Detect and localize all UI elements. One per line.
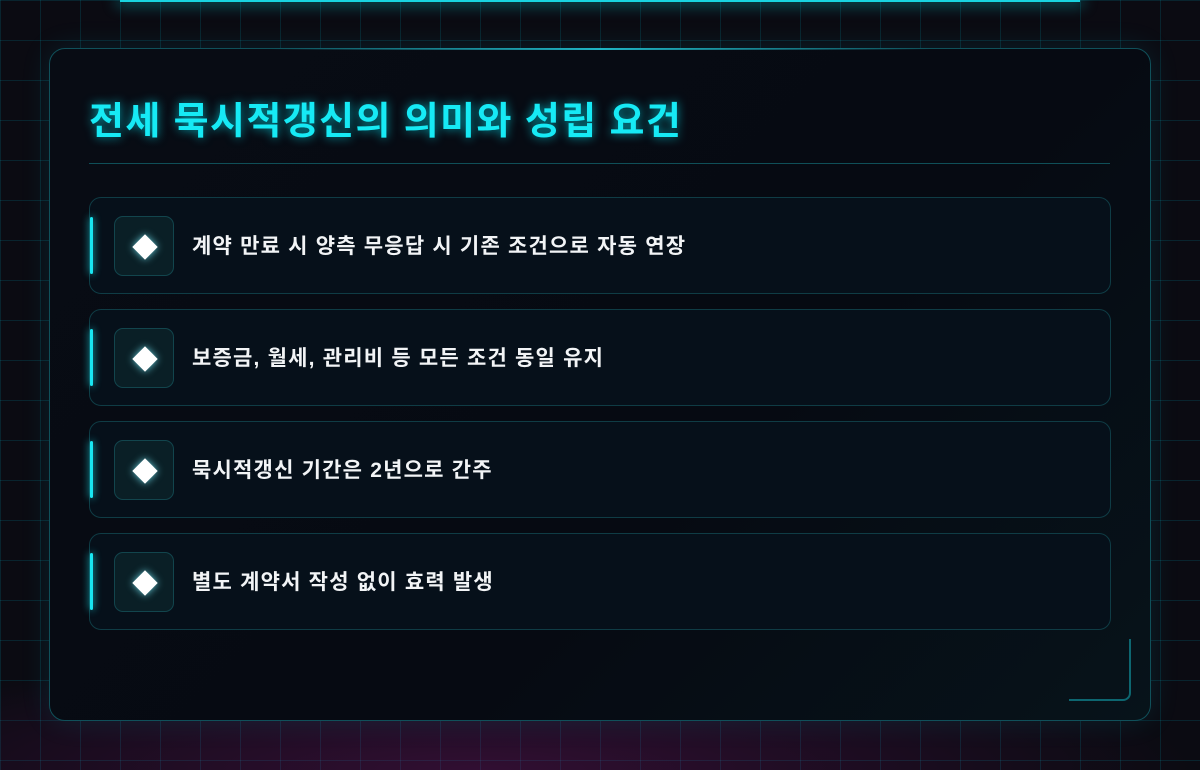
icon: diamond — [114, 440, 174, 500]
text: 계약 만료 시 양측 무응답 시 기존 조건으로 자동 연장 — [192, 235, 686, 258]
text: 묵시적갱신 기간은 2년으로 간주 — [192, 459, 493, 482]
corner bracket — [1069, 639, 1131, 701]
item 3 — [89, 421, 1111, 518]
icon: diamond — [114, 328, 174, 388]
item 1 — [89, 197, 1111, 294]
icon: diamond — [114, 216, 174, 276]
title: 전세 묵시적갱신의 의미와 성립 요건 — [89, 101, 682, 143]
text: 보증금, 월세, 관리비 등 모든 조건 동일 유지 — [192, 347, 604, 370]
text: 별도 계약서 작성 없이 효력 발생 — [192, 571, 494, 594]
item 2 — [89, 309, 1111, 406]
item 4 — [89, 533, 1111, 630]
icon: diamond — [114, 552, 174, 612]
